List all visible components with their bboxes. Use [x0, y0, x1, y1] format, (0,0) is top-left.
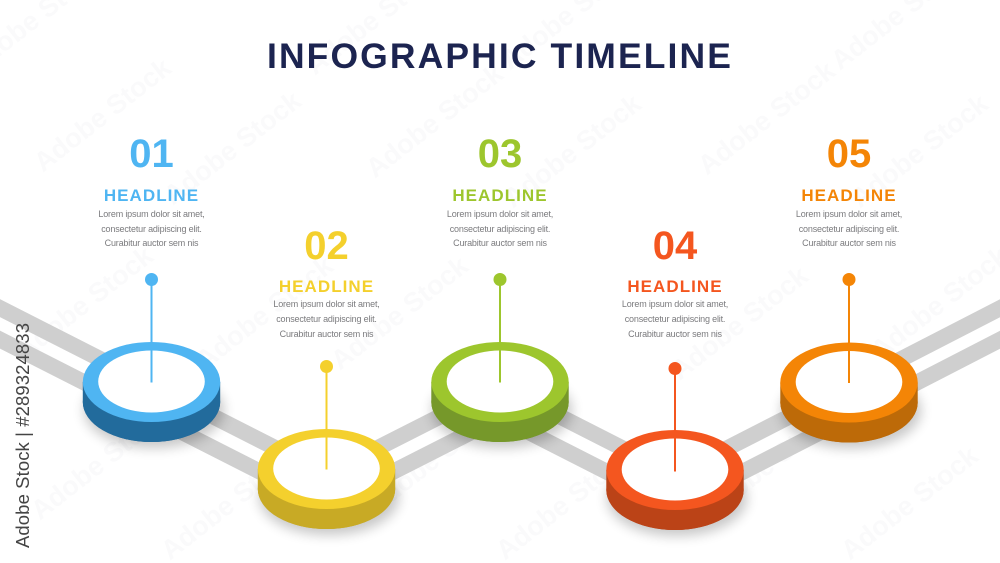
shadow 05 [781, 372, 921, 448]
watermark pattern: Adobe Stock [665, 260, 814, 386]
pin 02 [320, 360, 333, 470]
body text 05 [796, 209, 902, 248]
body text 04: consectetur adipiscing elit. [625, 314, 725, 324]
watermark pattern: Adobe Stock [695, 400, 844, 526]
watermark pattern: Adobe Stock [10, 240, 159, 366]
shadow 02 [259, 459, 399, 535]
body text 04: Lorem ipsum dolor sit amet, [622, 299, 728, 309]
number 02: 02 [304, 224, 349, 268]
body text 05: Lorem ipsum dolor sit amet, [796, 209, 902, 219]
watermark pattern: Adobe Stock [692, 55, 841, 181]
body text 04 [622, 299, 728, 339]
shadow 01 [84, 372, 224, 448]
title: INFOGRAPHIC TIMELINE [267, 36, 733, 76]
stock credit: Adobe Stock | #289324833 [12, 323, 33, 548]
disc 02 [258, 429, 395, 529]
step 05 [780, 132, 921, 448]
step 04 [606, 224, 747, 536]
pin 01 [145, 273, 158, 382]
disc 05 [780, 342, 918, 442]
headline 01: HEADLINE [104, 186, 199, 205]
body text 02: consectetur adipiscing elit. [276, 314, 377, 324]
body text 03 [447, 209, 553, 248]
body text 03: Lorem ipsum dolor sit amet, [447, 209, 553, 219]
road: lower grey band [0, 330, 1000, 506]
headline 05: HEADLINE [801, 186, 897, 205]
headline 02: HEADLINE [279, 277, 374, 296]
body text 01: consectetur adipiscing elit. [101, 224, 202, 234]
shadow 03 [432, 372, 572, 448]
body text 04: Curabitur auctor sem nis [628, 329, 723, 339]
step 02 [258, 224, 399, 535]
body text 02 [273, 299, 380, 339]
watermark pattern: Adobe Stock [835, 440, 984, 563]
body text 05: consectetur adipiscing elit. [799, 224, 899, 234]
disc 01 [83, 342, 220, 442]
watermark pattern: Adobe Stock [360, 395, 509, 521]
body text 03: consectetur adipiscing elit. [450, 224, 550, 234]
body text 03: Curabitur auctor sem nis [453, 238, 548, 248]
watermark pattern: Adobe Stock [490, 440, 639, 563]
number 03: 03 [478, 132, 522, 176]
body text 05: Curabitur auctor sem nis [802, 238, 897, 248]
body text 02: Lorem ipsum dolor sit amet, [273, 299, 380, 309]
disc 04 [606, 430, 744, 530]
body text 02: Curabitur auctor sem nis [280, 329, 374, 339]
body text 01: Curabitur auctor sem nis [105, 238, 199, 248]
headline 04: HEADLINE [627, 277, 723, 296]
watermark pattern: Adobe Stock [498, 88, 647, 214]
number 01: 01 [129, 132, 174, 176]
step 03 [431, 132, 572, 448]
watermark pattern: Adobe Stock [845, 88, 994, 214]
road: upper grey band [0, 298, 1000, 475]
watermark pattern: Adobe Stock [25, 400, 174, 526]
watermark pattern: Adobe Stock [190, 250, 339, 376]
pin 03 [494, 273, 506, 382]
number 05: 05 [827, 132, 871, 176]
number 04: 04 [653, 224, 698, 268]
watermark pattern: Adobe Stock [158, 85, 307, 211]
pin 05 [842, 273, 856, 383]
shadow 04 [607, 460, 747, 536]
body text 01 [98, 209, 205, 248]
body text 01: Lorem ipsum dolor sit amet, [98, 209, 205, 219]
watermark pattern: Adobe Stock [155, 440, 304, 563]
watermark pattern: Adobe Stock [28, 52, 177, 178]
watermark pattern: Adobe Stock [360, 58, 509, 184]
step 01 [83, 132, 224, 448]
headline 03: HEADLINE [452, 186, 548, 205]
pin 04 [668, 362, 682, 472]
disc 03 [431, 342, 569, 442]
watermark pattern: Adobe Stock [325, 250, 474, 376]
